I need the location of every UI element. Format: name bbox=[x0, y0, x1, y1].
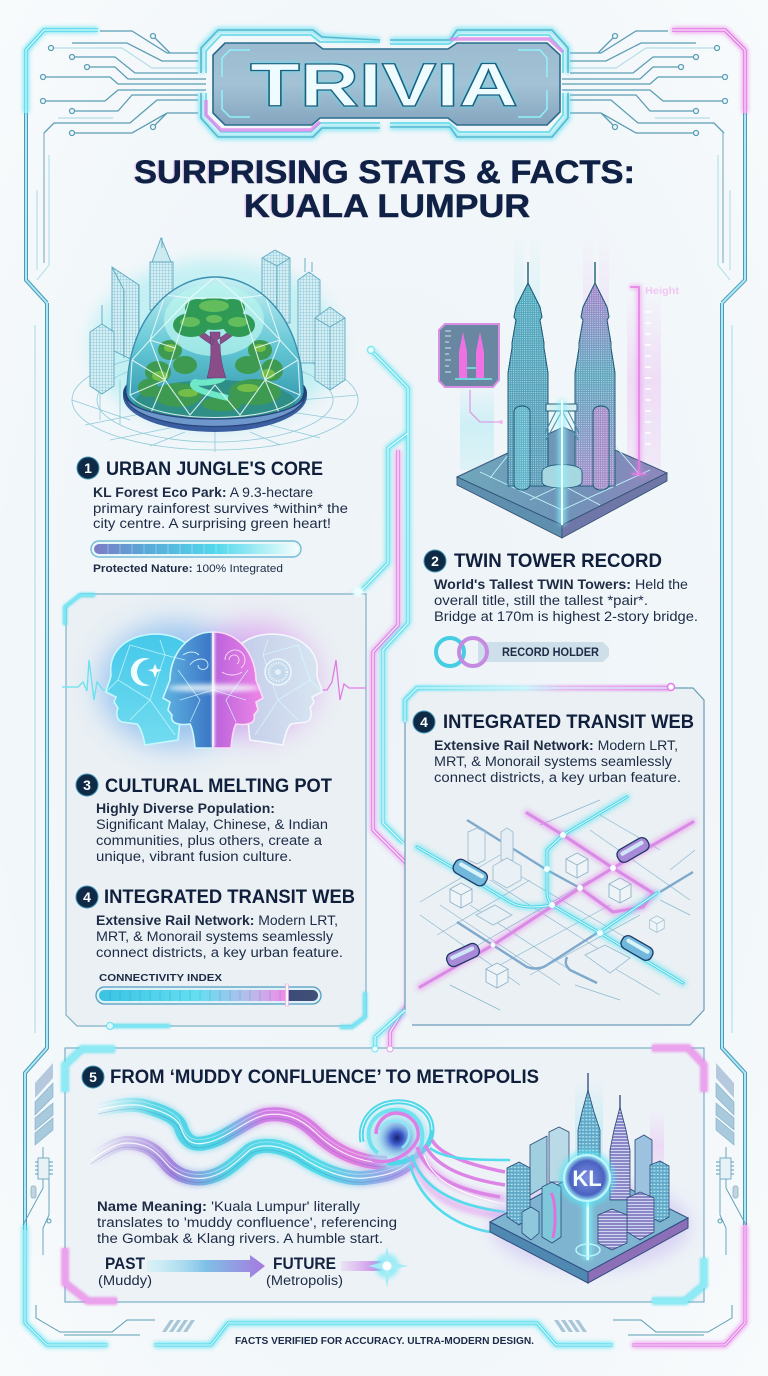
future label: FUTURE bbox=[273, 1254, 336, 1273]
left head bbox=[106, 634, 188, 745]
bottom circuit details bbox=[36, 1305, 732, 1335]
center head bbox=[163, 632, 213, 748]
body 3: unique, vibrant fusion culture. bbox=[96, 849, 292, 864]
street grid bbox=[420, 800, 695, 1010]
panel: culture and transit bbox=[62, 586, 366, 1030]
future label: (Metropolis) bbox=[266, 1273, 343, 1288]
number badge 2 bbox=[424, 550, 446, 572]
footer note: FACTS VERIFIED FOR ACCURACY. ULTRA-MODERN DESIGN. bbox=[235, 1335, 534, 1347]
number badge 1 bbox=[77, 457, 99, 479]
connector nodes bbox=[372, 1046, 393, 1052]
circuit traces left of badge bbox=[40, 31, 206, 136]
panel: transit map bbox=[405, 684, 704, 1025]
right head bbox=[240, 634, 322, 745]
number badge 5: 5 bbox=[89, 1069, 97, 1085]
left side tech details bbox=[23, 1063, 53, 1255]
number badge 4 bbox=[76, 886, 98, 908]
body 4: connect districts, a key urban feature. bbox=[434, 770, 681, 785]
section 2: twin tower record bbox=[424, 550, 698, 666]
heading 5: FROM ‘MUDDY CONFLUENCE’ TO METROPOLIS bbox=[110, 1067, 539, 1088]
body 2 bbox=[434, 577, 698, 624]
geodesic struts bbox=[130, 277, 300, 418]
facet lines bbox=[106, 640, 322, 735]
forest bbox=[135, 340, 295, 424]
number badge 2: 2 bbox=[431, 553, 439, 569]
body 4: Extensive Rail Network: Modern LRT, bbox=[434, 738, 678, 753]
trail to star bbox=[341, 1261, 381, 1271]
light beam bbox=[576, 1200, 600, 1260]
past label: PAST bbox=[105, 1254, 146, 1273]
past label bbox=[98, 1254, 152, 1288]
kl badge: KL bbox=[572, 1166, 602, 1191]
section 4: integrated transit web, left bbox=[76, 886, 355, 1006]
outflow to city bbox=[412, 1147, 505, 1215]
corner accents bbox=[65, 1048, 704, 1301]
arrow past to future bbox=[147, 1255, 265, 1278]
section 1: urban jungle's core bbox=[77, 457, 348, 575]
body 3: Significant Malay, Chinese, & Indian bbox=[96, 817, 328, 832]
body 1: city centre. A surprising green heart! bbox=[93, 516, 331, 531]
number badge 4: 4 bbox=[83, 889, 91, 905]
trains bbox=[445, 835, 655, 969]
skyline bbox=[507, 1073, 669, 1250]
body 4: Extensive Rail Network: Modern LRT, bbox=[96, 913, 338, 928]
heading 2: TWIN TOWER RECORD bbox=[454, 551, 662, 572]
swirl motifs bbox=[183, 650, 245, 675]
number badge 4 bbox=[413, 711, 435, 733]
inset tower screen bbox=[439, 324, 503, 424]
body 1: KL Forest Eco Park: A 9.3-hectare bbox=[93, 485, 313, 500]
body 1 bbox=[93, 485, 348, 531]
circuit traces right of badge bbox=[562, 31, 728, 136]
subtitle: KUALA LUMPUR bbox=[242, 188, 531, 224]
body 5: the Gombak & Klang rivers. A humble start. bbox=[97, 1231, 383, 1246]
body 5: translates to 'muddy confluence', referencing bbox=[97, 1215, 397, 1230]
body 5: Name Meaning: 'Kuala Lumpur' literally bbox=[97, 1199, 360, 1214]
number badge 1: 1 bbox=[84, 460, 92, 476]
subtitle: SURPRISING STATS & FACTS: bbox=[134, 154, 635, 190]
heading 4: INTEGRATED TRANSIT WEB bbox=[443, 712, 694, 733]
kl city illustration bbox=[490, 1073, 690, 1283]
body 2: overall title, still the tallest *pair*. bbox=[434, 593, 648, 608]
body 4: connect districts, a key urban feature. bbox=[96, 945, 343, 960]
height scale: Height bbox=[645, 285, 680, 297]
section 4: integrated transit web, right bbox=[413, 711, 694, 785]
connectivity bar bbox=[96, 984, 321, 1006]
center spark bbox=[168, 632, 260, 747]
subtitle: KUALA LUMPUR bbox=[244, 188, 530, 224]
glass dome bbox=[123, 360, 307, 432]
kl badge bbox=[559, 1150, 615, 1206]
progress label: Protected Nature: 100% Integrated bbox=[93, 563, 283, 575]
record holder pill bbox=[436, 638, 609, 666]
body 3 bbox=[96, 801, 328, 864]
rail glow bbox=[417, 797, 693, 987]
section 3: cultural melting pot bbox=[76, 774, 332, 864]
number badge 4: 4 bbox=[420, 714, 428, 730]
body 3: Highly Diverse Population: bbox=[96, 801, 275, 816]
progress bar: protected nature bbox=[91, 541, 301, 557]
heads illustration bbox=[62, 622, 366, 748]
whirlpool bbox=[361, 1102, 432, 1170]
city platform bbox=[490, 1168, 688, 1283]
cubes bbox=[450, 828, 664, 988]
starburst bbox=[368, 1246, 408, 1288]
number badge 3: 3 bbox=[83, 777, 91, 793]
heading 3: CULTURAL MELTING POT bbox=[105, 776, 332, 797]
body 3: communities, plus others, create a bbox=[96, 833, 323, 848]
trivia badge bbox=[201, 30, 568, 137]
panel: muddy confluence to metropolis bbox=[65, 1046, 704, 1302]
center light beam bbox=[558, 400, 566, 525]
tree bbox=[164, 284, 264, 378]
heartbeat lines bbox=[62, 660, 366, 700]
heading 1: URBAN JUNGLE'S CORE bbox=[106, 459, 323, 480]
light beams bbox=[460, 232, 661, 482]
body 5 bbox=[97, 1199, 397, 1246]
platform bbox=[457, 427, 667, 538]
subtitle: SURPRISING STATS & FACTS: bbox=[132, 154, 635, 190]
river swirl illustration bbox=[91, 1101, 510, 1232]
number badge 5 bbox=[82, 1066, 104, 1088]
trivia badge: TRIVIA bbox=[250, 51, 518, 119]
river glow bbox=[91, 1105, 412, 1178]
body 1: primary rainforest survives *within* the bbox=[93, 501, 348, 516]
body 4: MRT, & Monorail systems seamlessly bbox=[96, 929, 333, 944]
connectivity label: CONNECTIVITY INDEX bbox=[99, 972, 222, 984]
right side tech details bbox=[716, 1063, 746, 1255]
body 4 bbox=[434, 738, 681, 785]
body 4: MRT, & Monorail systems seamlessly bbox=[434, 754, 672, 769]
future label bbox=[266, 1254, 343, 1288]
number badge 3 bbox=[76, 774, 98, 796]
past to future timeline bbox=[98, 1246, 408, 1288]
transit network map bbox=[417, 797, 695, 1010]
heading 4: INTEGRATED TRANSIT WEB bbox=[104, 887, 355, 908]
body 2: Bridge at 170m is highest 2-story bridge. bbox=[434, 609, 698, 624]
wheel bbox=[265, 659, 291, 685]
crescent and star bbox=[131, 658, 162, 686]
body 4 bbox=[96, 913, 343, 960]
skyscrapers bbox=[90, 238, 345, 394]
connector circuits between panels bbox=[360, 346, 408, 1050]
grey lines bbox=[457, 820, 693, 983]
record holder pill: RECORD HOLDER bbox=[502, 647, 600, 659]
twin towers illustration bbox=[439, 232, 680, 538]
river bands bbox=[91, 1101, 412, 1182]
badge title: TRIVIA bbox=[250, 51, 518, 119]
dome illustration: urban jungle bbox=[72, 238, 358, 452]
subtitle bbox=[132, 154, 635, 224]
badge plate bbox=[213, 43, 560, 125]
petronas towers bbox=[508, 262, 615, 490]
skybridge bbox=[545, 404, 579, 440]
body 2: World's Tallest TWIN Towers: Held the bbox=[434, 577, 688, 592]
height scale bbox=[630, 285, 680, 474]
past label: (Muddy) bbox=[98, 1273, 152, 1288]
city ground rings bbox=[72, 350, 358, 452]
